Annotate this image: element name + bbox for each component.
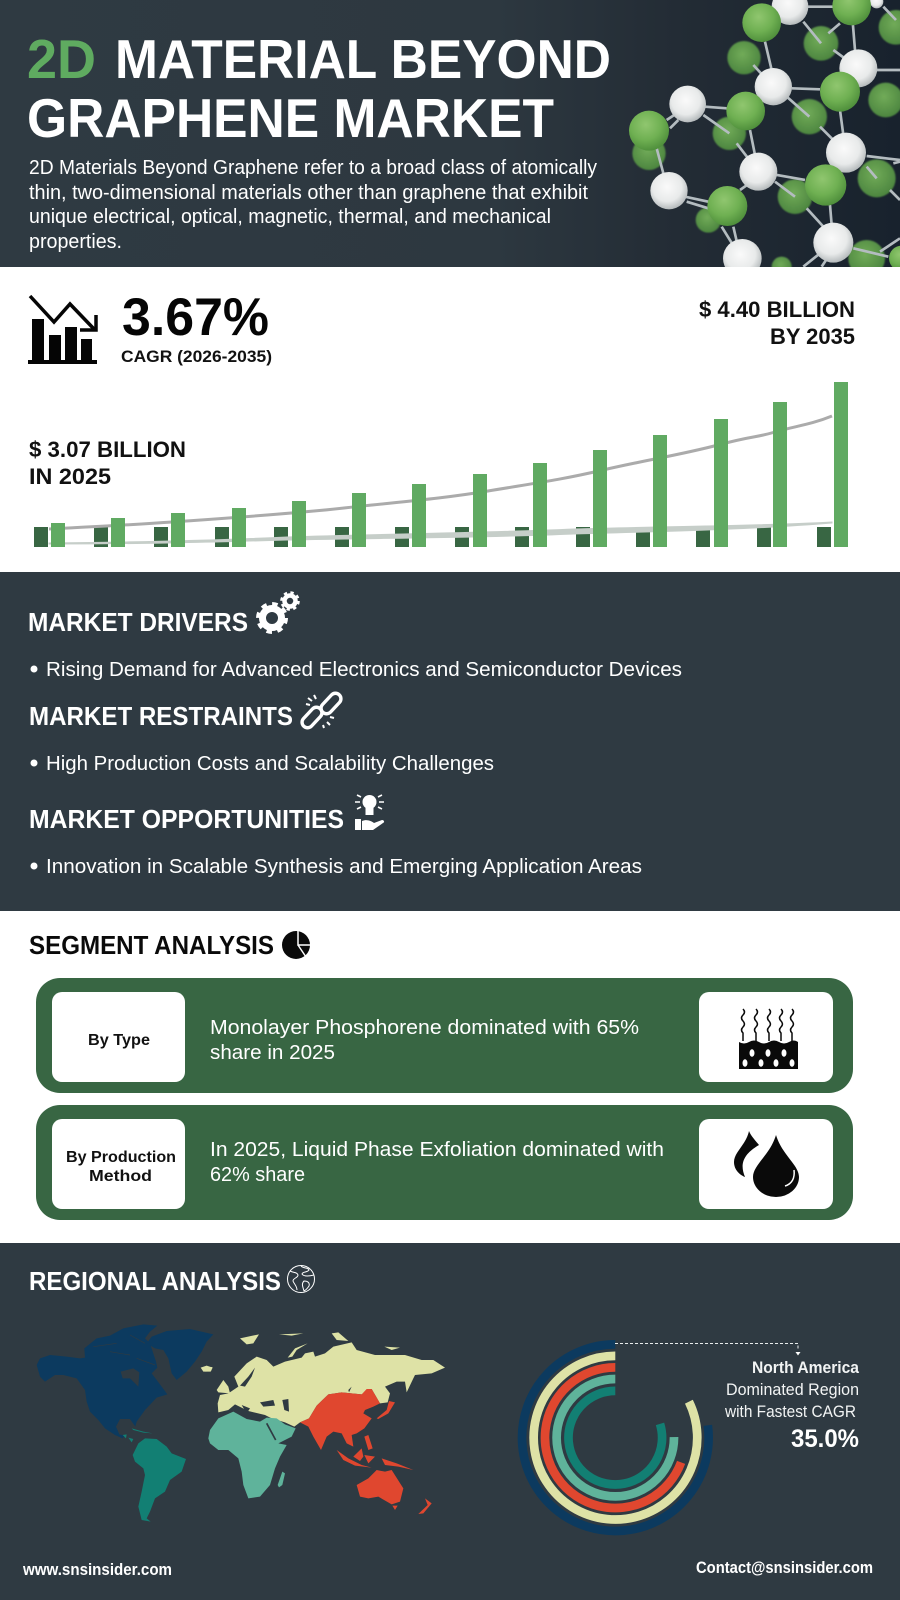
icon: bulb on hand [355, 795, 384, 830]
panel: header banner [0, 0, 900, 278]
text: by production method: 62% share [210, 1164, 305, 1186]
icon: globe [288, 1266, 314, 1292]
bar chart [34, 382, 848, 547]
text: restraint: High Production Costs and Scalability Challenges [46, 752, 494, 775]
label box: by production method [52, 1119, 185, 1209]
value 2025: IN 2025 [29, 464, 111, 489]
intro text: thin, two-dimensional materials other than graphene that exhibit [29, 182, 588, 204]
title: GRAPHENE MARKET [27, 87, 554, 149]
image: molecule structure [629, 0, 900, 278]
map: asia pacific [300, 1389, 432, 1514]
text: by type [210, 1017, 639, 1064]
value 2025: $ 3.07 BILLION [29, 437, 186, 462]
panel: market size [0, 267, 900, 572]
heading: market opportunities: MARKET OPPORTUNITIES [29, 804, 344, 834]
value 2025 [29, 437, 186, 489]
title: MATERIAL BEYOND [115, 28, 611, 90]
intro text: unique electrical, optical, magnetic, thermal, and mechanical [29, 206, 551, 228]
text: driver: Rising Demand for Advanced Electronics and Semiconductor Devices [46, 658, 682, 681]
callout leader line [615, 1344, 800, 1356]
callout: north america: 35.0% [791, 1425, 859, 1453]
callout: north america: Dominated Region [726, 1380, 859, 1399]
icon: broken link [300, 691, 343, 730]
text: by production method: In 2025, Liquid Phase Exfoliation dominated with [210, 1139, 664, 1161]
value 2035 [699, 297, 855, 349]
label box: by type: By Type [88, 1032, 150, 1049]
text: by type: Monolayer Phosphorene dominated with 65% [210, 1017, 639, 1039]
panel: segment analysis [0, 911, 900, 1243]
icon: declining chart [28, 296, 97, 364]
heading: regional analysis: REGIONAL ANALYSIS [29, 1266, 281, 1296]
value 2035: $ 4.40 BILLION [699, 297, 855, 322]
CAGR value: 3.67% [122, 288, 269, 347]
panel: drivers restraints opportunities [0, 572, 900, 911]
icon box: surface layer [699, 992, 833, 1082]
map: europe and russia [205, 1332, 445, 1427]
icon box: liquid drops [699, 1119, 833, 1209]
icon: pie chart [282, 930, 311, 959]
card: by type [36, 978, 853, 1093]
panel: regional analysis [0, 1243, 900, 1600]
icon: gears [258, 592, 298, 632]
intro text: 2D Materials Beyond Graphene refer to a broad class of atomically [29, 157, 597, 179]
text: by type: share in 2025 [210, 1042, 335, 1064]
heading: market restraints: MARKET RESTRAINTS [29, 701, 293, 731]
heading: market drivers: MARKET DRIVERS [28, 607, 248, 637]
heading: segment analysis: SEGMENT ANALYSIS [29, 930, 274, 960]
CAGR label: CAGR (2026-2035) [121, 347, 272, 366]
text: by production method [210, 1139, 664, 1186]
card: by production method [36, 1105, 853, 1220]
footer website: www.snsinsider.com [22, 1561, 172, 1579]
label box: by production method: By Production [66, 1149, 176, 1166]
map: africa and arabia [208, 1412, 296, 1498]
title: 2D [27, 28, 96, 90]
callout: north america [724, 1358, 859, 1453]
label box: by type [52, 992, 185, 1082]
title [27, 28, 611, 149]
intro text [29, 157, 597, 253]
label box: by production method: Method [89, 1168, 152, 1185]
text: opportunity: Innovation in Scalable Synthesis and Emerging Application Areas [46, 855, 642, 878]
callout: north america: with Fastest CAGR [724, 1402, 856, 1421]
footer contact: Contact@snsinsider.com [696, 1559, 873, 1577]
map: eurasia africa oceania [205, 1332, 445, 1514]
world map [37, 1324, 445, 1522]
intro text: properties. [29, 231, 122, 253]
map: americas [37, 1324, 213, 1522]
callout: north america: North America [752, 1358, 859, 1377]
radial bar chart [522, 1344, 709, 1531]
value 2035: BY 2035 [770, 324, 855, 349]
